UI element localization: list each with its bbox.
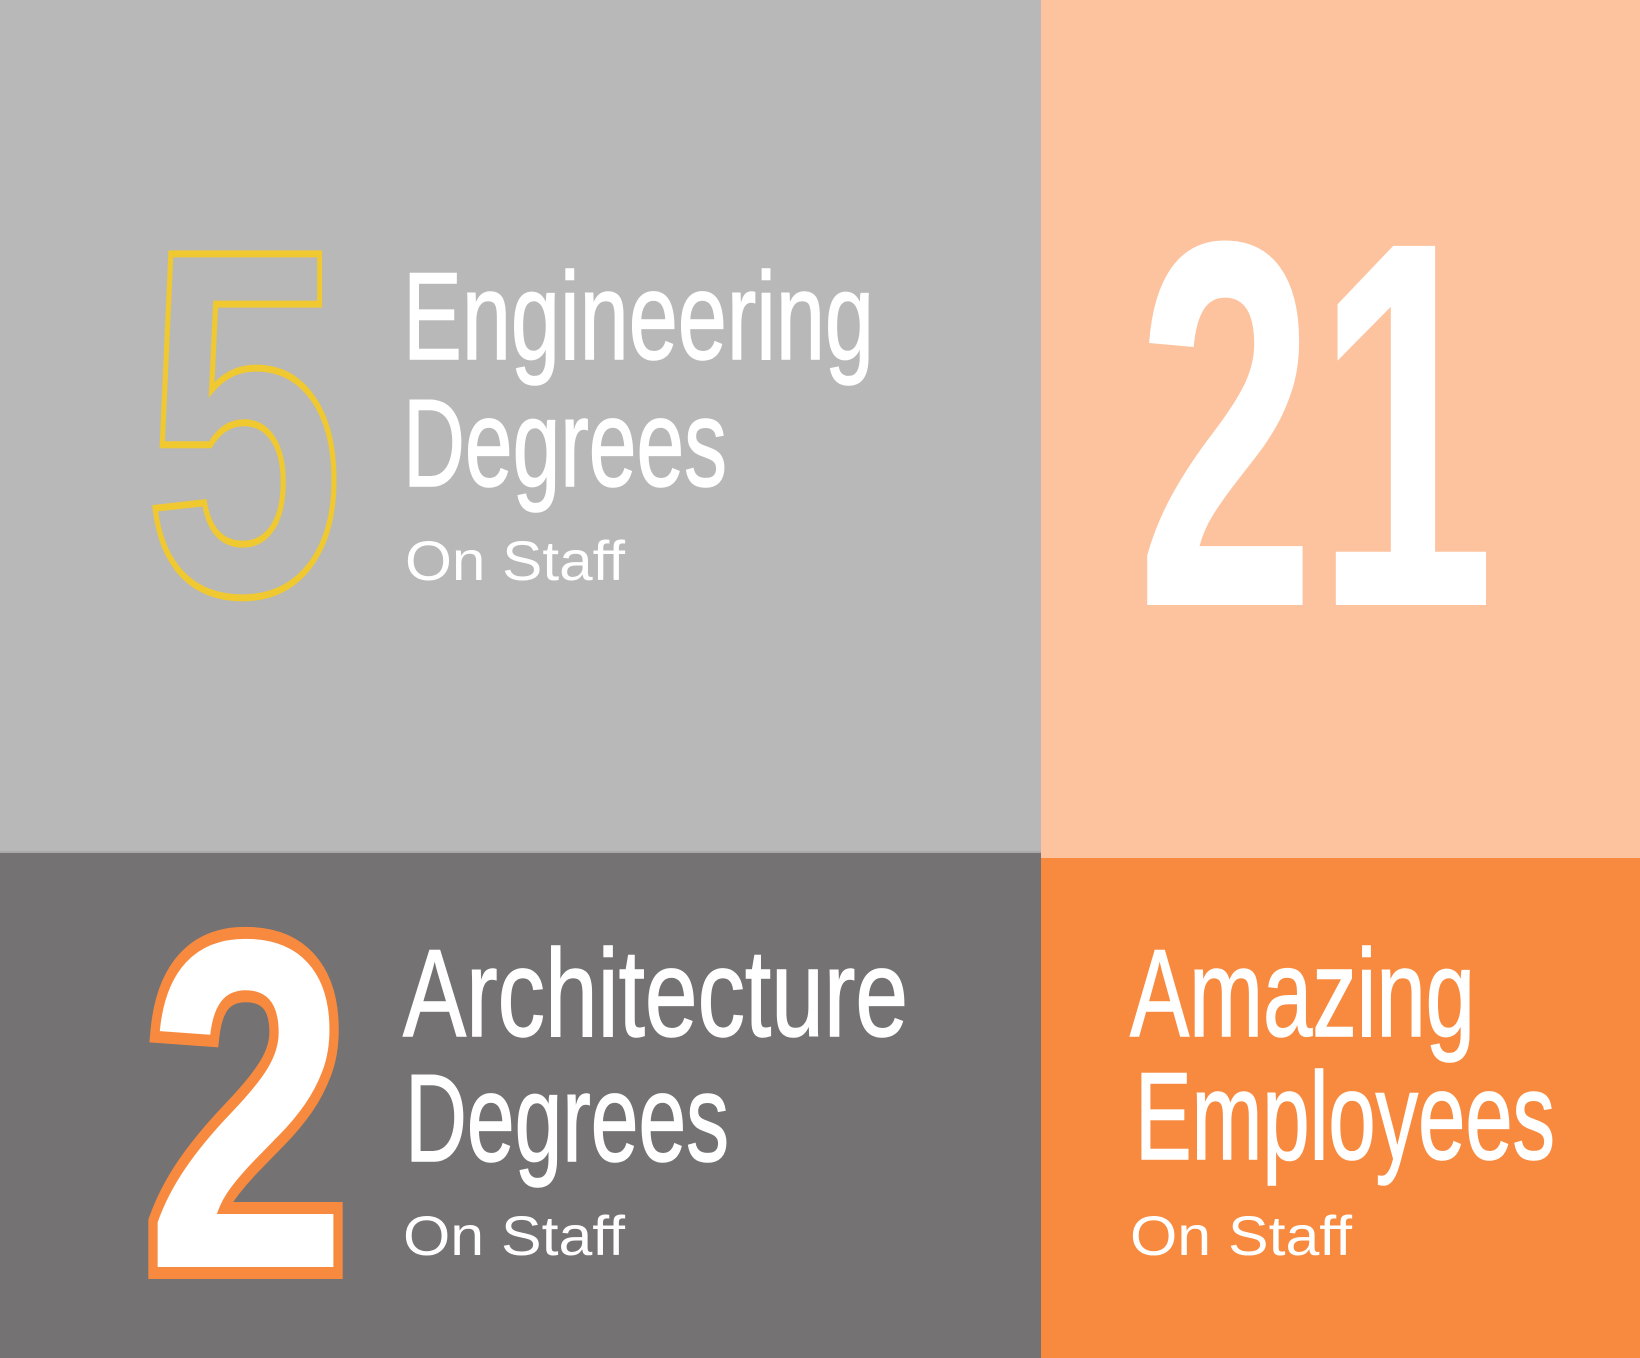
panel: total: [1041, 0, 1640, 858]
heading: engineering degrees: Degrees: [403, 375, 727, 513]
heading: engineering degrees: [403, 248, 874, 513]
panel: employees: [1041, 858, 1640, 1358]
heading: architecture degrees: [403, 925, 908, 1188]
heading: amazing employees: Amazing: [1130, 925, 1475, 1063]
number 2: 2: [145, 842, 348, 1358]
number 5 outline: 5: [144, 148, 344, 698]
heading: architecture degrees: Architecture: [403, 925, 908, 1063]
subtext: on staff: On Staff: [1130, 1204, 1352, 1267]
heading: engineering degrees: Engineering: [403, 248, 874, 386]
subtext: on staff: On Staff: [403, 1204, 625, 1267]
heading: amazing employees: [1130, 925, 1555, 1186]
heading: architecture degrees: Degrees: [405, 1050, 729, 1188]
panel: engineering: [0, 0, 1041, 853]
subtext: on staff: On Staff: [405, 529, 625, 592]
panel: architecture: [0, 842, 1041, 1358]
